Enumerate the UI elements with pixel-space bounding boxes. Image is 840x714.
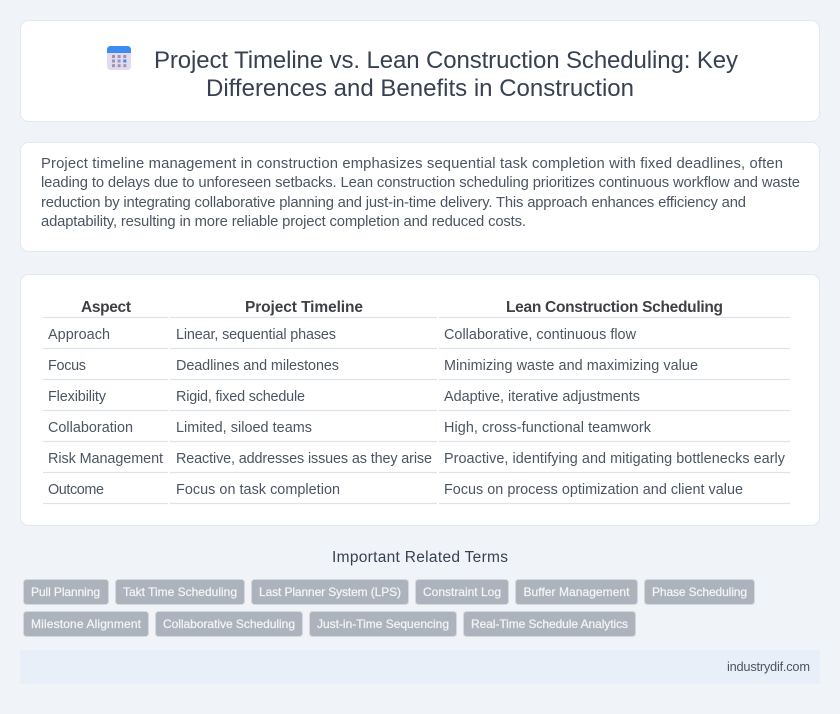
- tag: just-in-time sequencing: Just-in-Time Sequencing: [317, 617, 449, 631]
- tag: phase scheduling: Phase Scheduling: [652, 585, 747, 599]
- table row: collaboration: [48, 420, 652, 436]
- table row: risk management: Risk Management: [48, 451, 163, 467]
- table row: flexibility: [48, 389, 640, 405]
- title: [154, 47, 738, 102]
- table row: outcome: Outcome: [48, 482, 104, 498]
- text block: introduction paragraph: adaptability, resulting in more reliable project completion and reduced costs.: [41, 214, 526, 230]
- table row: flexibility: Rigid, fixed schedule: [176, 389, 305, 405]
- tag: last planner system: Last Planner System (LPS): [259, 585, 401, 599]
- table row: focus: Minimizing waste and maximizing value: [444, 358, 698, 374]
- tag: collaborative scheduling: [156, 612, 302, 636]
- table row: approach: Collaborative, continuous flow: [444, 327, 637, 343]
- table row: flexibility: Flexibility: [48, 389, 107, 405]
- title: Differences and Benefits in Construction: [206, 75, 634, 102]
- tag: phase scheduling: [644, 580, 754, 604]
- tag list: related terms: [24, 580, 754, 636]
- panel: introduction: [20, 142, 820, 252]
- table row: flexibility: Adaptive, iterative adjustments: [444, 389, 640, 405]
- table row: approach: Approach: [48, 327, 110, 343]
- tag: takt time scheduling: Takt Time Scheduling: [123, 585, 237, 599]
- tag: milestone alignment: Milestone Alignment: [31, 617, 142, 631]
- tag: pull planning: Pull Planning: [31, 585, 100, 599]
- tag: collaborative scheduling: Collaborative Scheduling: [163, 617, 295, 631]
- table row: approach: Linear, sequential phases: [176, 327, 336, 343]
- heading: important related terms: Important Related Terms: [332, 549, 508, 566]
- icon: calendar: [107, 46, 131, 70]
- table row: outcome: [48, 482, 743, 498]
- footer: [20, 650, 820, 684]
- table header row: [81, 299, 723, 316]
- table row: focus: [48, 358, 698, 374]
- table row: collaboration: Collaboration: [48, 420, 133, 436]
- table row: outcome: Focus on process optimization and client value: [444, 482, 743, 498]
- table row: risk management: Proactive, identifying and mitigating bottlenecks early: [444, 451, 786, 467]
- tag: buffer management: Buffer Management: [524, 585, 630, 599]
- table row: risk management: [48, 451, 786, 467]
- tag: real-time schedule analytics: Real-Time Schedule Analytics: [471, 617, 628, 631]
- table row: risk management: Reactive, addresses issues as they arise: [176, 451, 432, 467]
- table header row: Lean Construction Scheduling: [506, 299, 723, 316]
- table row: outcome: Focus on task completion: [176, 482, 340, 498]
- tag: pull planning: [24, 580, 108, 604]
- title: Project Timeline vs. Lean Construction Scheduling: Key: [154, 47, 738, 74]
- tag: just-in-time sequencing: [310, 612, 456, 636]
- text block: introduction paragraph: leading to delays due to unforeseen setbacks. Lean construction scheduling prioritizes continuous workflow and waste: [41, 175, 800, 191]
- tag: last planner system: [252, 580, 408, 604]
- tag: milestone alignment: [24, 612, 148, 636]
- text block: introduction paragraph: Project timeline management in construction emphasizes sequential task completion with fixed deadlines, often: [41, 156, 783, 172]
- table header row: Project Timeline: [245, 299, 363, 316]
- footer site name: industrydif.com: [727, 659, 810, 674]
- table row: approach: [48, 327, 637, 343]
- text block: introduction paragraph: reduction by integrating collaborative planning and just-in-time delivery. This approach enhances efficiency and: [41, 195, 746, 211]
- table row: focus: Focus: [48, 358, 86, 374]
- tag: constraint log: [416, 580, 508, 604]
- tag: real-time schedule analytics: [464, 612, 636, 636]
- panel: header: [20, 20, 820, 122]
- tag: buffer management: [516, 580, 638, 604]
- tag: takt time scheduling: [116, 580, 244, 604]
- table row: collaboration: High, cross-functional teamwork: [444, 420, 652, 436]
- table row: collaboration: Limited, siloed teams: [176, 420, 312, 436]
- text block: introduction paragraph: [41, 156, 800, 230]
- panel: comparison table: [20, 274, 820, 526]
- table header row: Aspect: [81, 299, 131, 316]
- table row: focus: Deadlines and milestones: [176, 358, 339, 374]
- tag: constraint log: Constraint Log: [423, 585, 501, 599]
